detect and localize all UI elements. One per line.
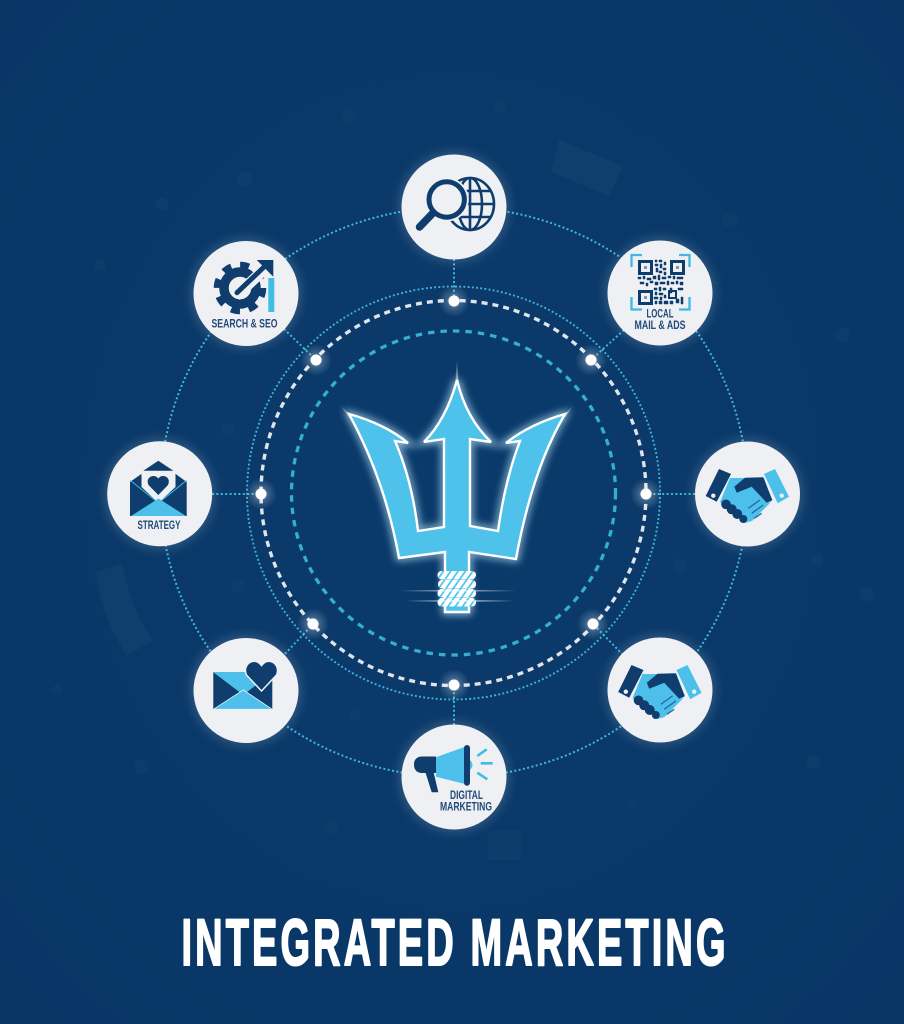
blue dashed ring <box>292 331 616 655</box>
node: handshake lower right <box>606 636 714 744</box>
thin inner ring <box>247 286 660 700</box>
node: local mail and ads: MAIL & ADS <box>634 320 686 332</box>
icon: heart <box>245 661 278 691</box>
icon: envelope <box>213 672 272 709</box>
node: local mail and ads <box>606 239 714 347</box>
node: digital marketing: MARKETING <box>440 801 492 813</box>
node: strategy <box>106 440 214 548</box>
label: STRATEGY <box>138 520 181 532</box>
icon: magnifier <box>420 178 469 227</box>
icon: bar <box>268 278 274 312</box>
icon: qr brackets <box>632 255 690 310</box>
node: digital marketing <box>400 723 508 831</box>
icon: open envelope <box>130 461 187 516</box>
label: SEARCH & SEO <box>212 318 278 330</box>
icon: handshake <box>706 469 789 523</box>
base glints <box>340 405 574 602</box>
outer orbit ring <box>160 207 748 777</box>
node: handshake right <box>694 440 802 548</box>
white dashed ring <box>261 300 646 686</box>
node: search and seo <box>192 240 300 348</box>
central trident emblem <box>340 360 574 612</box>
title: INTEGRATED MARKETING <box>182 908 726 980</box>
ring junction dots <box>245 285 662 701</box>
icon: qr code <box>638 260 685 305</box>
icon: handshake <box>618 665 702 719</box>
label: DIGITAL <box>450 790 483 802</box>
node: mail with heart <box>192 636 300 744</box>
label: LOCAL <box>646 308 674 320</box>
icon: growth arrow <box>236 260 273 296</box>
connector spokes <box>212 259 695 725</box>
icon: megaphone <box>414 745 493 792</box>
rope binding <box>438 571 476 606</box>
icon: globe <box>446 178 494 230</box>
icon: gear <box>217 265 263 311</box>
node: search globe <box>400 153 508 261</box>
top spark <box>456 360 458 382</box>
